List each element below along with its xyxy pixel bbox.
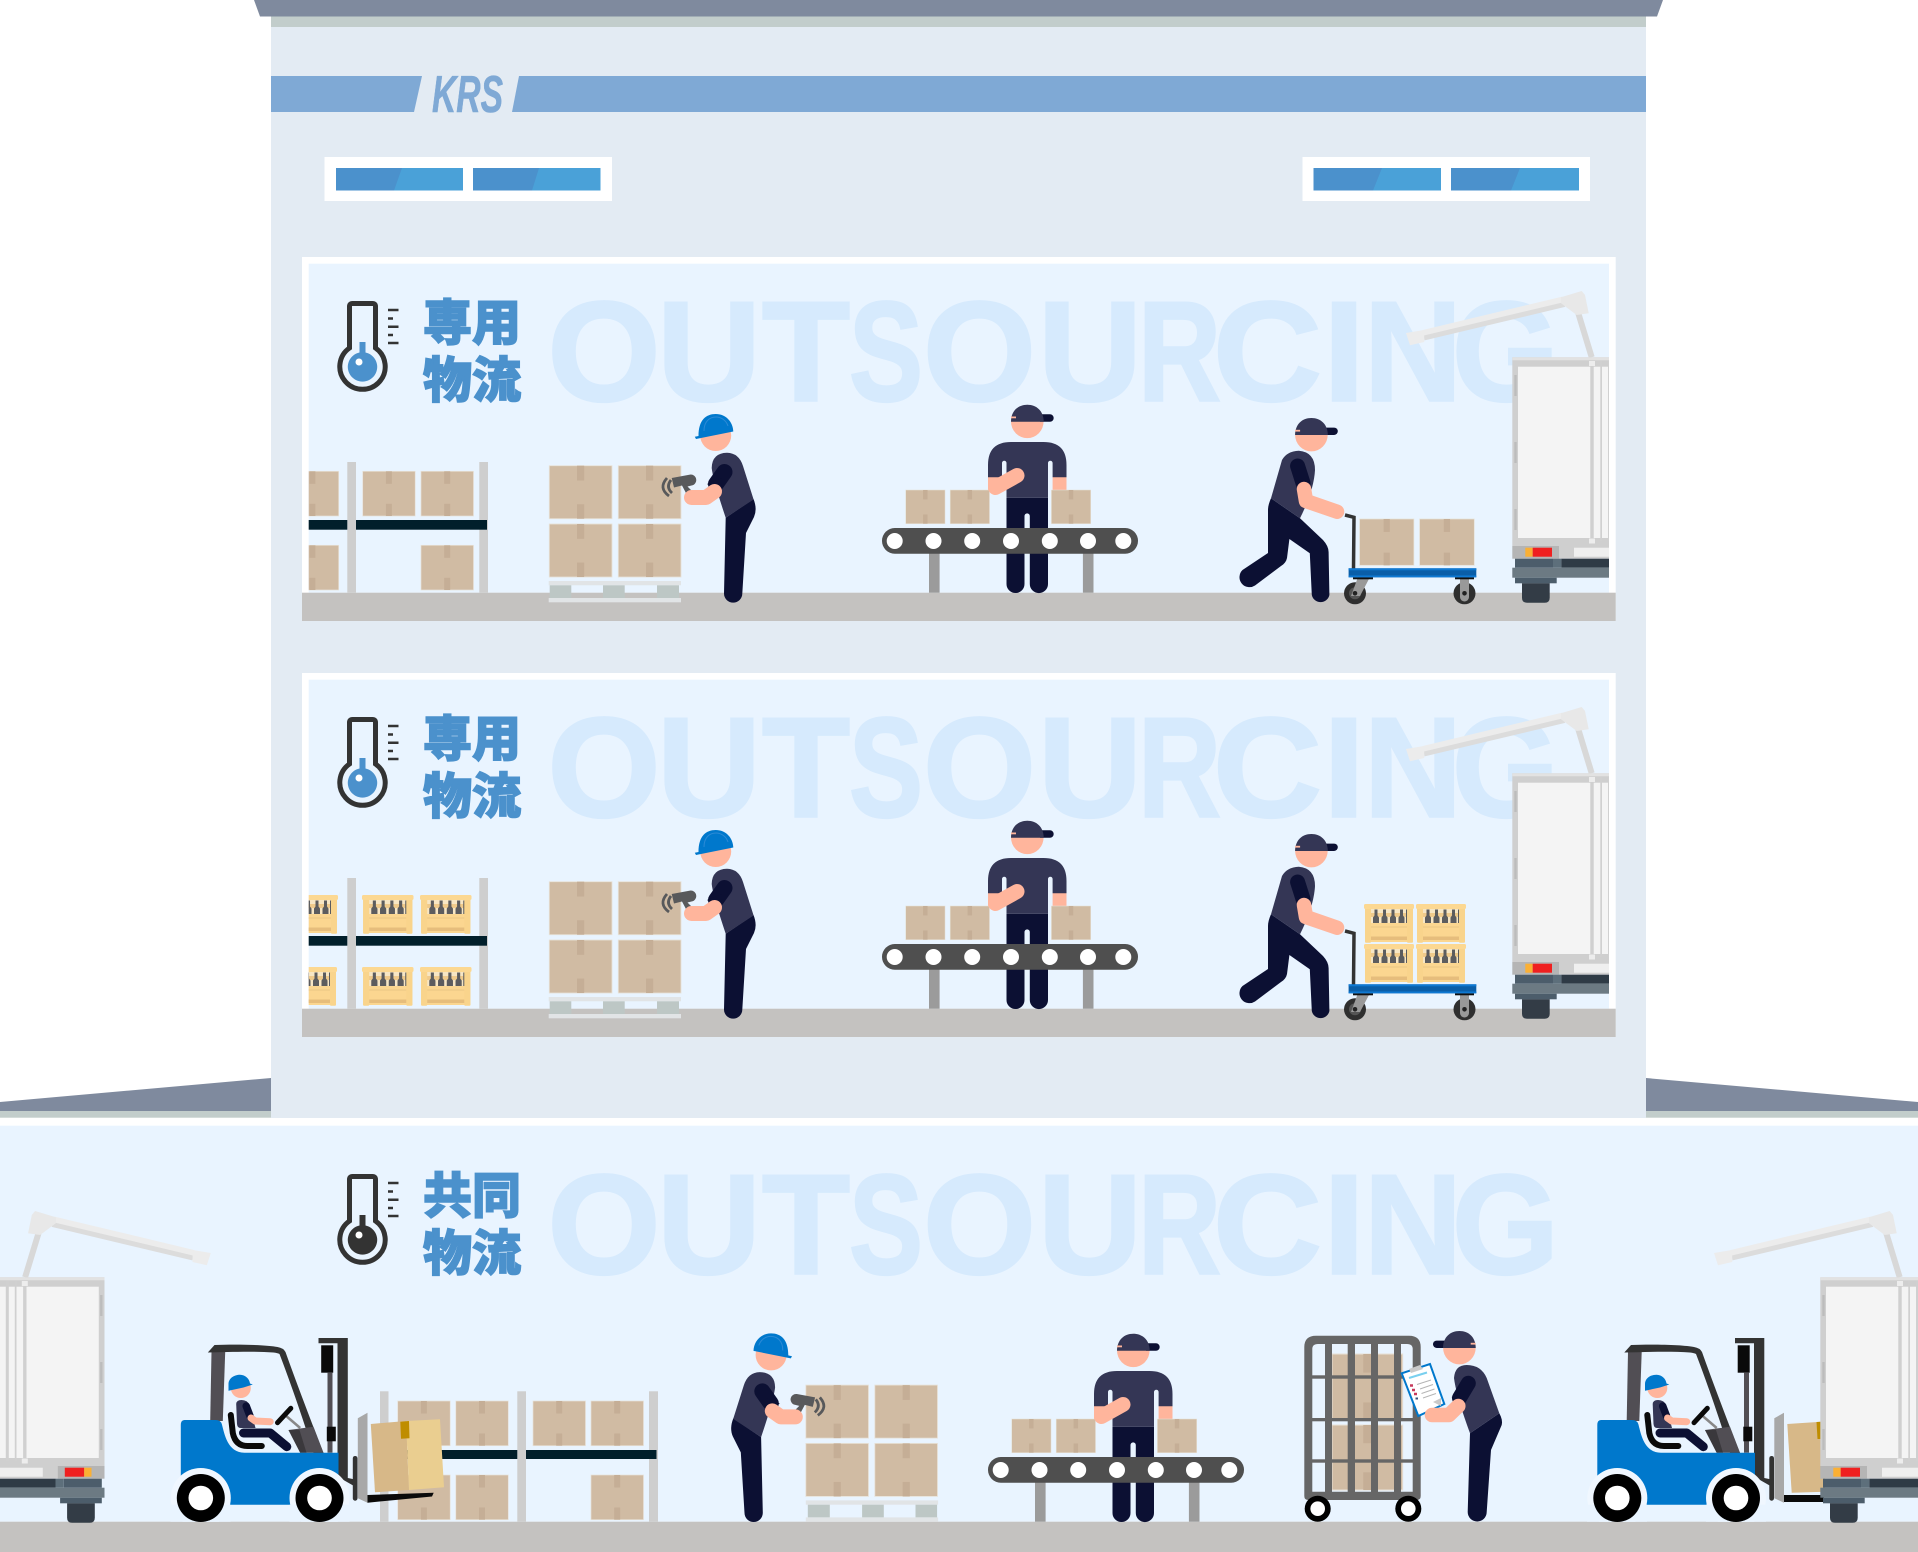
watermark: I bbox=[1323, 272, 1365, 432]
company sign band bbox=[271, 66, 1646, 124]
heading: 物流 bbox=[423, 770, 521, 824]
worker pushing cart bbox=[1239, 418, 1476, 604]
watermark: I bbox=[1323, 688, 1365, 848]
watermark: T bbox=[762, 1146, 850, 1304]
watermark: O bbox=[548, 688, 660, 848]
thermometer icon blue bbox=[340, 720, 398, 805]
conveyor with packer bbox=[988, 1334, 1244, 1522]
watermark: U bbox=[1038, 688, 1142, 848]
watermark: T bbox=[762, 688, 850, 848]
pallet of cartons bbox=[549, 466, 681, 602]
left forklift with carton bbox=[170, 1338, 444, 1528]
left roof wing bbox=[0, 1078, 271, 1111]
conveyor with packer bbox=[882, 405, 1138, 593]
worker pushing cart bbox=[1239, 834, 1476, 1020]
watermark: O bbox=[923, 688, 1036, 848]
watermark: R bbox=[1138, 1146, 1221, 1304]
heading: 共同 bbox=[423, 1170, 521, 1224]
truck bbox=[1406, 291, 1617, 603]
watermark: U bbox=[657, 272, 761, 432]
right roof wing bbox=[1646, 1078, 1918, 1111]
truck bbox=[1406, 707, 1617, 1019]
window right bbox=[1302, 157, 1590, 201]
heading bbox=[423, 1170, 521, 1282]
heading bbox=[423, 297, 521, 408]
watermark: O bbox=[923, 272, 1036, 432]
watermark: O bbox=[923, 1146, 1036, 1304]
watermark: N bbox=[1364, 272, 1462, 432]
panel: shared logistics ground floor bbox=[0, 1126, 1918, 1552]
heading: 物流 bbox=[423, 1228, 521, 1282]
left wing trim bbox=[0, 1111, 271, 1118]
heading: 専用 bbox=[423, 713, 521, 767]
watermark: S bbox=[849, 272, 923, 432]
watermark: N bbox=[1364, 1146, 1462, 1304]
watermark: O bbox=[548, 272, 660, 432]
conveyor with packer bbox=[882, 821, 1138, 1009]
watermark: I bbox=[1323, 1146, 1365, 1304]
heading bbox=[423, 713, 521, 824]
shelf with crates bbox=[308, 878, 488, 1008]
shelf with cartons bbox=[380, 1391, 658, 1522]
watermark: O bbox=[548, 1146, 660, 1304]
floor bbox=[302, 593, 1616, 621]
watermark: U bbox=[657, 1146, 761, 1304]
watermark: R bbox=[1138, 272, 1221, 432]
roll cage with cartons bbox=[1304, 1336, 1421, 1522]
worker with clipboard bbox=[1402, 1331, 1502, 1522]
watermark: T bbox=[762, 272, 850, 432]
floor bbox=[302, 1009, 1616, 1037]
watermark: C bbox=[1213, 1146, 1322, 1304]
cart cartons bbox=[1360, 519, 1474, 565]
watermark: C bbox=[1213, 688, 1322, 848]
pallet of cartons bbox=[549, 882, 681, 1018]
heading: 専用 bbox=[423, 297, 521, 351]
panel: dedicated logistics floor 1 bbox=[286, 257, 1617, 621]
left truck bbox=[0, 1211, 211, 1523]
worker with scanner and pallet bbox=[731, 1333, 938, 1522]
cart crates bbox=[1364, 904, 1466, 983]
watermark: G bbox=[1452, 688, 1559, 848]
right forklift with carton bbox=[1587, 1338, 1825, 1528]
KRS logo: KRS bbox=[432, 66, 503, 124]
thermometer icon blue bbox=[340, 304, 398, 389]
watermark: U bbox=[657, 688, 761, 848]
watermark: U bbox=[1038, 1146, 1142, 1304]
watermark: C bbox=[1213, 272, 1322, 432]
shelf with cartons bbox=[308, 462, 488, 592]
window left bbox=[324, 157, 612, 201]
watermark: G bbox=[1452, 272, 1559, 432]
panel: dedicated logistics floor 2 bbox=[287, 673, 1617, 1037]
worker with scanner bbox=[663, 414, 756, 603]
roof trim bbox=[271, 16, 1646, 27]
right truck bbox=[1714, 1211, 1918, 1523]
floor bbox=[0, 1522, 1918, 1552]
watermark: R bbox=[1138, 688, 1221, 848]
clipboard bbox=[1402, 1364, 1444, 1416]
right wing trim bbox=[1646, 1111, 1918, 1118]
worker with scanner bbox=[663, 830, 756, 1019]
building facade bbox=[271, 27, 1646, 1118]
watermark: N bbox=[1364, 688, 1462, 848]
watermark: S bbox=[849, 688, 923, 848]
heading: 物流 bbox=[423, 354, 521, 408]
watermark: S bbox=[849, 1146, 923, 1304]
watermark: U bbox=[1038, 272, 1142, 432]
roof bbox=[254, 0, 1663, 16]
watermark: G bbox=[1452, 1146, 1559, 1304]
thermometer icon dark bbox=[340, 1176, 398, 1262]
